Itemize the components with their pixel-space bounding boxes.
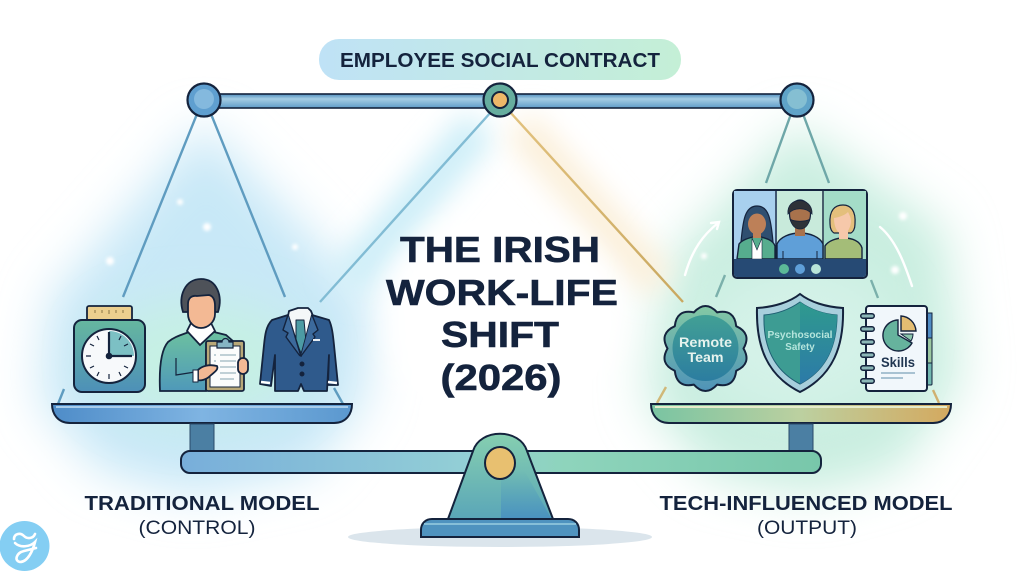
centre pivot [484,84,516,116]
title [386,229,618,398]
background glows [40,125,962,495]
top balance beam [188,84,814,116]
heading pill: employee social contract [319,39,681,80]
lower beam [181,451,821,473]
icon: psychosocial safety shield: Psychosocial [768,330,833,341]
icon: time clock [74,306,145,392]
logo badge [0,521,50,571]
fulcrum stand [421,434,579,537]
icon: video call screen [733,190,867,278]
icon: suit jacket [260,308,338,391]
arrows around video screen [685,222,912,286]
suspension strings [58,112,939,404]
label: tech-influenced model: TECH-INFLUENCED MODEL [660,493,952,515]
icon: manager with clipboard [160,279,248,391]
title: (2026) [440,357,562,398]
icon: remote team gear: Team [688,350,724,365]
base shadow [348,527,652,547]
icon: skills notebook [863,306,932,391]
title: THE IRISH [400,229,600,270]
label: tech-influenced model [660,493,952,539]
icon: remote team gear [664,306,747,391]
icon: psychosocial safety shield: Safety [785,342,815,353]
label: tech-influenced model: (OUTPUT) [757,518,857,539]
heading pill: employee social contract: EMPLOYEE SOCIAL CONTRACT [340,50,660,72]
label: traditional model: (CONTROL) [138,518,256,539]
right pan [651,404,951,423]
icon: remote team gear: Remote [679,335,733,350]
icon: skills notebook: Skills [881,354,915,370]
label: traditional model: TRADITIONAL MODEL [84,493,320,515]
title: SHIFT [441,314,559,355]
label: traditional model [84,493,320,539]
right pivot ball [780,84,814,116]
pan support posts [190,424,813,452]
icon: psychosocial safety shield [757,294,843,392]
left pivot ball [188,84,220,116]
title: WORK-LIFE [386,272,618,313]
left pan [52,404,352,423]
